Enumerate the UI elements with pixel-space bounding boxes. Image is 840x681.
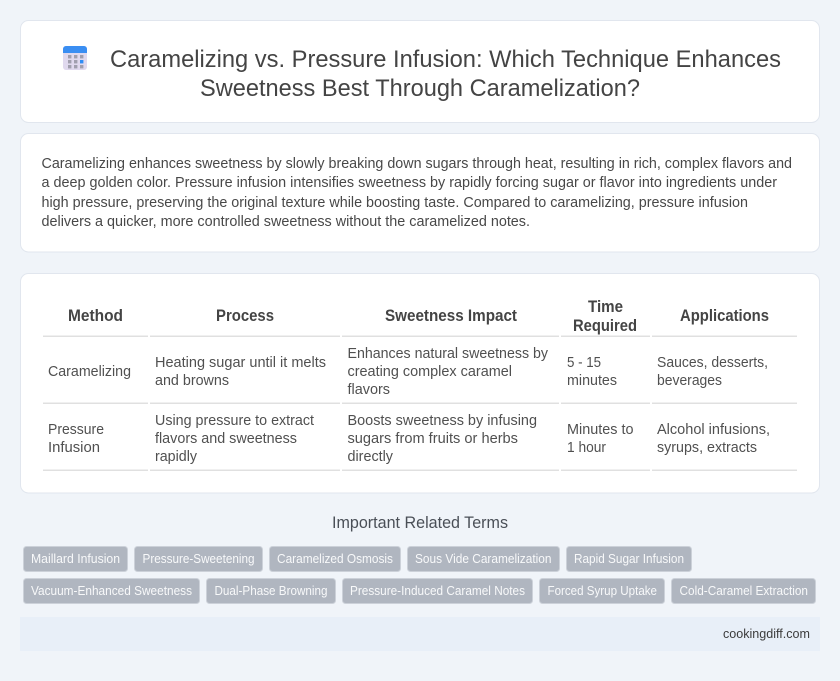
tag list: related terms: Rapid Sugar Infusion	[574, 552, 684, 566]
table row: caramelizing: Caramelizing	[48, 364, 131, 380]
title	[110, 46, 781, 102]
table row: pressure infusion: Pressure	[48, 422, 104, 438]
panel: comparison table	[20, 274, 820, 493]
table row: caramelizing: beverages	[657, 373, 722, 389]
table row: pressure infusion: 1 hour	[567, 440, 606, 456]
table row: pressure infusion: Minutes to	[567, 422, 634, 438]
table row: caramelizing: creating complex caramel	[348, 364, 512, 380]
tag list: related terms: Forced Syrup Uptake	[548, 584, 657, 598]
table row: caramelizing	[48, 346, 768, 398]
table header row: Sweetness Impact	[385, 307, 518, 325]
table row: caramelizing: Heating sugar until it melts	[155, 355, 326, 371]
heading: important related terms: Important Related Terms	[332, 514, 508, 532]
tag list: related terms: Sous Vide Caramelization	[415, 552, 552, 566]
tag list: related terms: Pressure-Induced Caramel Notes	[350, 584, 525, 598]
panel: title header	[20, 20, 820, 122]
title: Sweetness Best Through Caramelization?	[200, 75, 640, 102]
table row: caramelizing: and browns	[155, 373, 229, 389]
tag list: related terms	[24, 546, 816, 604]
table header row: Time	[588, 298, 623, 316]
tag list: related terms: Cold-Caramel Extraction	[680, 584, 808, 598]
table row: pressure infusion: Alcohol infusions,	[657, 422, 770, 438]
table row: pressure infusion	[48, 413, 770, 465]
table row: pressure infusion: syrups, extracts	[657, 440, 757, 456]
table row: pressure infusion: directly	[348, 449, 394, 465]
table row: pressure infusion: flavors and sweetness	[155, 431, 297, 447]
panel: intro paragraph: a deep golden color. Pressure infusion intensifies sweetness by rapidly forcing sugar or flavor into ingredients under	[42, 174, 777, 191]
table row: pressure infusion: Infusion	[48, 440, 100, 456]
panel: intro paragraph	[20, 134, 820, 252]
table row: pressure infusion: rapidly	[155, 449, 198, 465]
panel: intro paragraph: high pressure, preserving the original texture while boosting taste. Compared to caramelizing, pressure infusion	[42, 194, 748, 211]
table row: caramelizing: minutes	[567, 373, 617, 389]
table row: caramelizing: flavors	[348, 382, 390, 398]
table header row	[68, 298, 769, 335]
table header row: Required	[573, 317, 637, 335]
table header row: Applications	[680, 307, 769, 325]
footer: source: cookingdiff.com	[723, 626, 810, 641]
title: Caramelizing vs. Pressure Infusion: Which Technique Enhances	[110, 46, 781, 73]
table row: caramelizing: Enhances natural sweetness by	[348, 346, 549, 362]
table row: pressure infusion: sugars from fruits or herbs	[348, 431, 518, 447]
table row: pressure infusion: Boosts sweetness by infusing	[348, 413, 537, 429]
tag list: related terms: Pressure-Sweetening	[142, 552, 255, 566]
table header row: Process	[216, 307, 274, 325]
table header row: Method	[68, 307, 123, 325]
tag list: related terms: Dual-Phase Browning	[214, 584, 328, 598]
footer: source	[20, 617, 820, 651]
icon: calendar	[63, 46, 87, 70]
tag list: related terms: Vacuum-Enhanced Sweetness	[31, 584, 192, 598]
tag list: related terms: Maillard Infusion	[31, 552, 120, 566]
panel: intro paragraph: delivers a quicker, more controlled sweetness without the caramelized notes.	[42, 213, 530, 230]
table row: caramelizing: 5 - 15	[567, 355, 601, 371]
panel: intro paragraph: Caramelizing enhances sweetness by slowly breaking down sugars through heat, resulting in rich, complex flavors and	[42, 155, 792, 172]
table row: pressure infusion: Using pressure to extract	[155, 413, 314, 429]
table row: caramelizing: Sauces, desserts,	[657, 355, 768, 371]
tag list: related terms: Caramelized Osmosis	[277, 552, 393, 566]
